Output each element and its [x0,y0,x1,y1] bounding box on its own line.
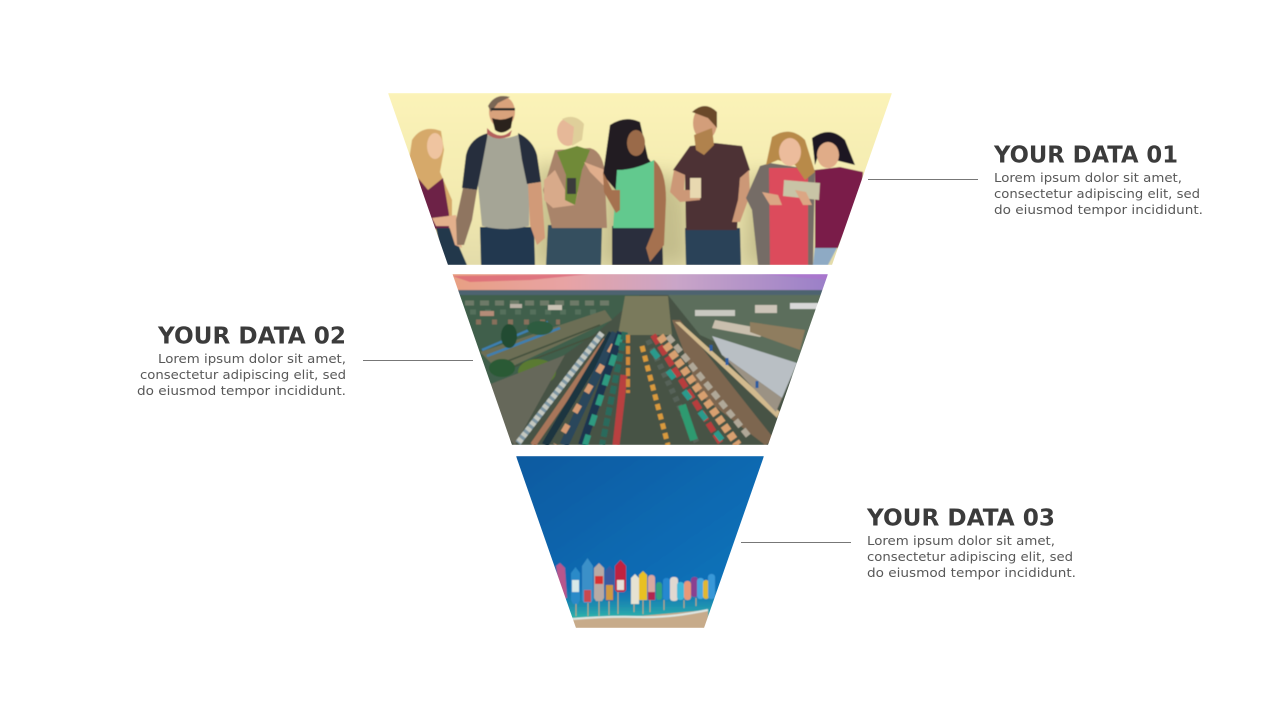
person 5 [685,228,741,265]
body text 02: Lorem ipsum dolor sit amet, [158,352,346,366]
person 2 [480,227,535,265]
heading 01: YOUR DATA 01 [993,142,1178,168]
body text 02 [137,352,346,398]
heading 02: YOUR DATA 02 [157,324,346,350]
text block: your data 03 [866,506,1076,580]
body text 01: do eiusmod tempor incididunt. [994,203,1203,217]
tablet [783,180,820,200]
centre ground [618,296,672,335]
body text 02: consectetur adipiscing elit, sed [140,368,346,382]
connector line 02 [363,360,473,362]
person 4 [612,226,663,265]
text block: your data 02 [137,324,346,398]
body text 01: Lorem ipsum dolor sit amet, [994,171,1182,185]
text block: your data 01 [993,142,1203,217]
boats [556,558,715,616]
rail cars [518,332,750,445]
person 3 [546,225,602,265]
person 1 [409,129,452,230]
funnel tier 1: photo of people [388,93,892,265]
embankment and warehouse [672,320,775,445]
person 6 [746,163,815,265]
body text 03: do eiusmod tempor incididunt. [867,566,1076,580]
body text 03 [867,534,1076,580]
town right [668,295,828,380]
connector line 01 [868,178,978,180]
person 7 [813,246,838,265]
body text 03: Lorem ipsum dolor sit amet, [867,534,1055,548]
body text 03: consectetur adipiscing elit, sed [867,550,1073,564]
funnel tier 3: aerial photo of boats at sea [516,456,764,628]
funnel tier 2: aerial photo of railway yard [452,274,828,445]
body text 02: do eiusmod tempor incididunt. [137,384,346,398]
connector line 03 [741,542,851,544]
heading 03: YOUR DATA 03 [866,506,1055,532]
town left [460,296,625,384]
body text 01: consectetur adipiscing elit, sed [994,187,1200,201]
body text 01 [994,171,1203,217]
